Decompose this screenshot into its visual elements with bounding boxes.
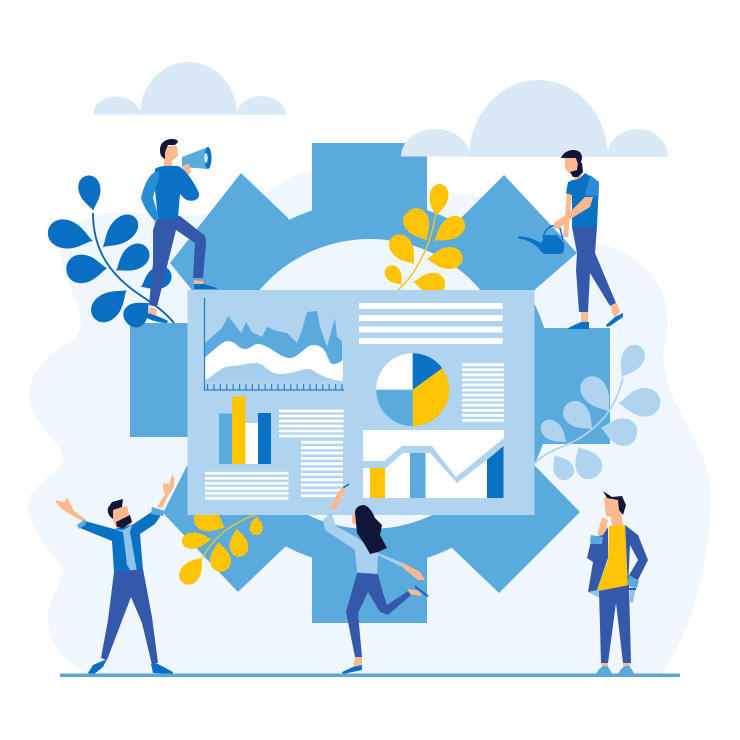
plant: blue leaves left <box>45 174 175 332</box>
dashboard panel <box>188 290 534 515</box>
text lines: beside bars <box>279 411 344 436</box>
text lines: lower column <box>301 442 343 496</box>
plant: light leaves right <box>535 341 661 484</box>
bar chart <box>219 396 271 464</box>
cloud: left <box>93 62 286 115</box>
person: man with raised arms <box>55 475 174 675</box>
area chart <box>204 298 344 390</box>
person: man with megaphone <box>141 139 217 323</box>
watering can <box>518 226 564 254</box>
ground line <box>60 674 680 677</box>
person: man with watering can <box>518 150 623 329</box>
combo chart <box>363 430 504 498</box>
megaphone <box>182 147 212 169</box>
background blob <box>28 170 711 675</box>
text lines: top right <box>359 303 502 344</box>
plant: yellow leaves top <box>381 183 469 296</box>
person: woman pointing <box>323 484 429 674</box>
cloud: right <box>401 80 668 157</box>
gear <box>130 143 610 623</box>
person: thinking man <box>587 491 648 674</box>
plant: yellow leaves bottom <box>175 503 263 589</box>
text lines: pie legend <box>462 365 504 420</box>
gear centre hole <box>225 239 515 529</box>
text lines: below bars <box>205 473 288 498</box>
pie chart <box>376 353 449 426</box>
